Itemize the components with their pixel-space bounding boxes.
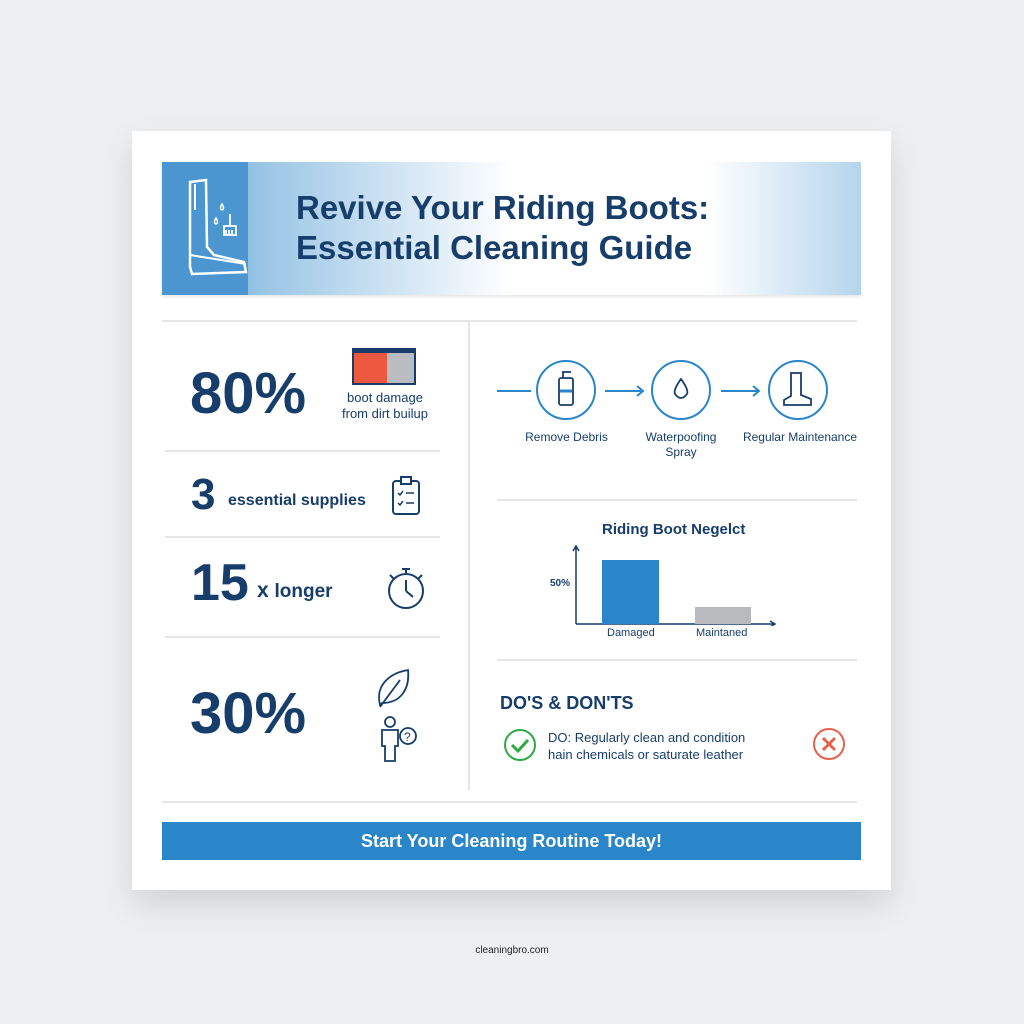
dos and donts <box>500 693 845 762</box>
call to action button: Start Your Cleaning Routine Today! <box>361 831 662 851</box>
dos and donts: DO: Regularly clean and condition <box>548 730 745 745</box>
bar chart: Riding Boot Negelct <box>602 521 745 538</box>
icon: cross <box>813 728 845 760</box>
stat: 80%: boot damage from dirt builup <box>342 390 428 421</box>
process flow <box>497 360 857 459</box>
icon: stopwatch <box>388 568 424 609</box>
process flow: Regular Maintenance <box>743 430 857 444</box>
stat: 30%: 30% <box>190 681 306 746</box>
stat: 3 supplies: essential supplies <box>228 492 366 509</box>
card <box>132 131 891 890</box>
bar chart: 50% <box>550 578 570 589</box>
bar chart: Maintaned <box>696 627 747 639</box>
header banner <box>162 162 861 295</box>
icon: leaf and person <box>378 669 417 762</box>
title: Essential Cleaning Guide <box>296 229 692 266</box>
dos and donts: DO'S & DON'TS <box>500 693 634 713</box>
stat: 15x longer: x longer <box>257 579 333 602</box>
stat: 80% <box>190 348 428 426</box>
process flow: Remove Debris <box>525 430 608 444</box>
dos and donts: hain chemicals or saturate leather <box>548 747 743 762</box>
title: Revive Your Riding Boots: <box>296 189 709 226</box>
icon: leaf and person: ? <box>404 730 411 744</box>
stat: 3 supplies: 3 <box>191 470 215 519</box>
process flow: Waterpoofing Spray <box>646 430 716 459</box>
stat: 30% <box>190 669 417 762</box>
title <box>296 189 709 266</box>
bar chart: Damaged <box>607 627 655 639</box>
icon: check <box>504 729 536 761</box>
stat: 80%: 80% <box>190 361 306 426</box>
stat: 15x longer: 15 <box>191 554 249 612</box>
icon: damage bar <box>352 348 416 385</box>
stat: 3 supplies <box>191 470 420 519</box>
footer: cleaningbro.com <box>475 945 549 956</box>
icon: clipboard <box>392 476 420 515</box>
icon: boot <box>162 162 248 295</box>
stat: 15x longer <box>191 554 424 612</box>
bar chart <box>550 521 776 639</box>
call to action button <box>162 822 861 860</box>
